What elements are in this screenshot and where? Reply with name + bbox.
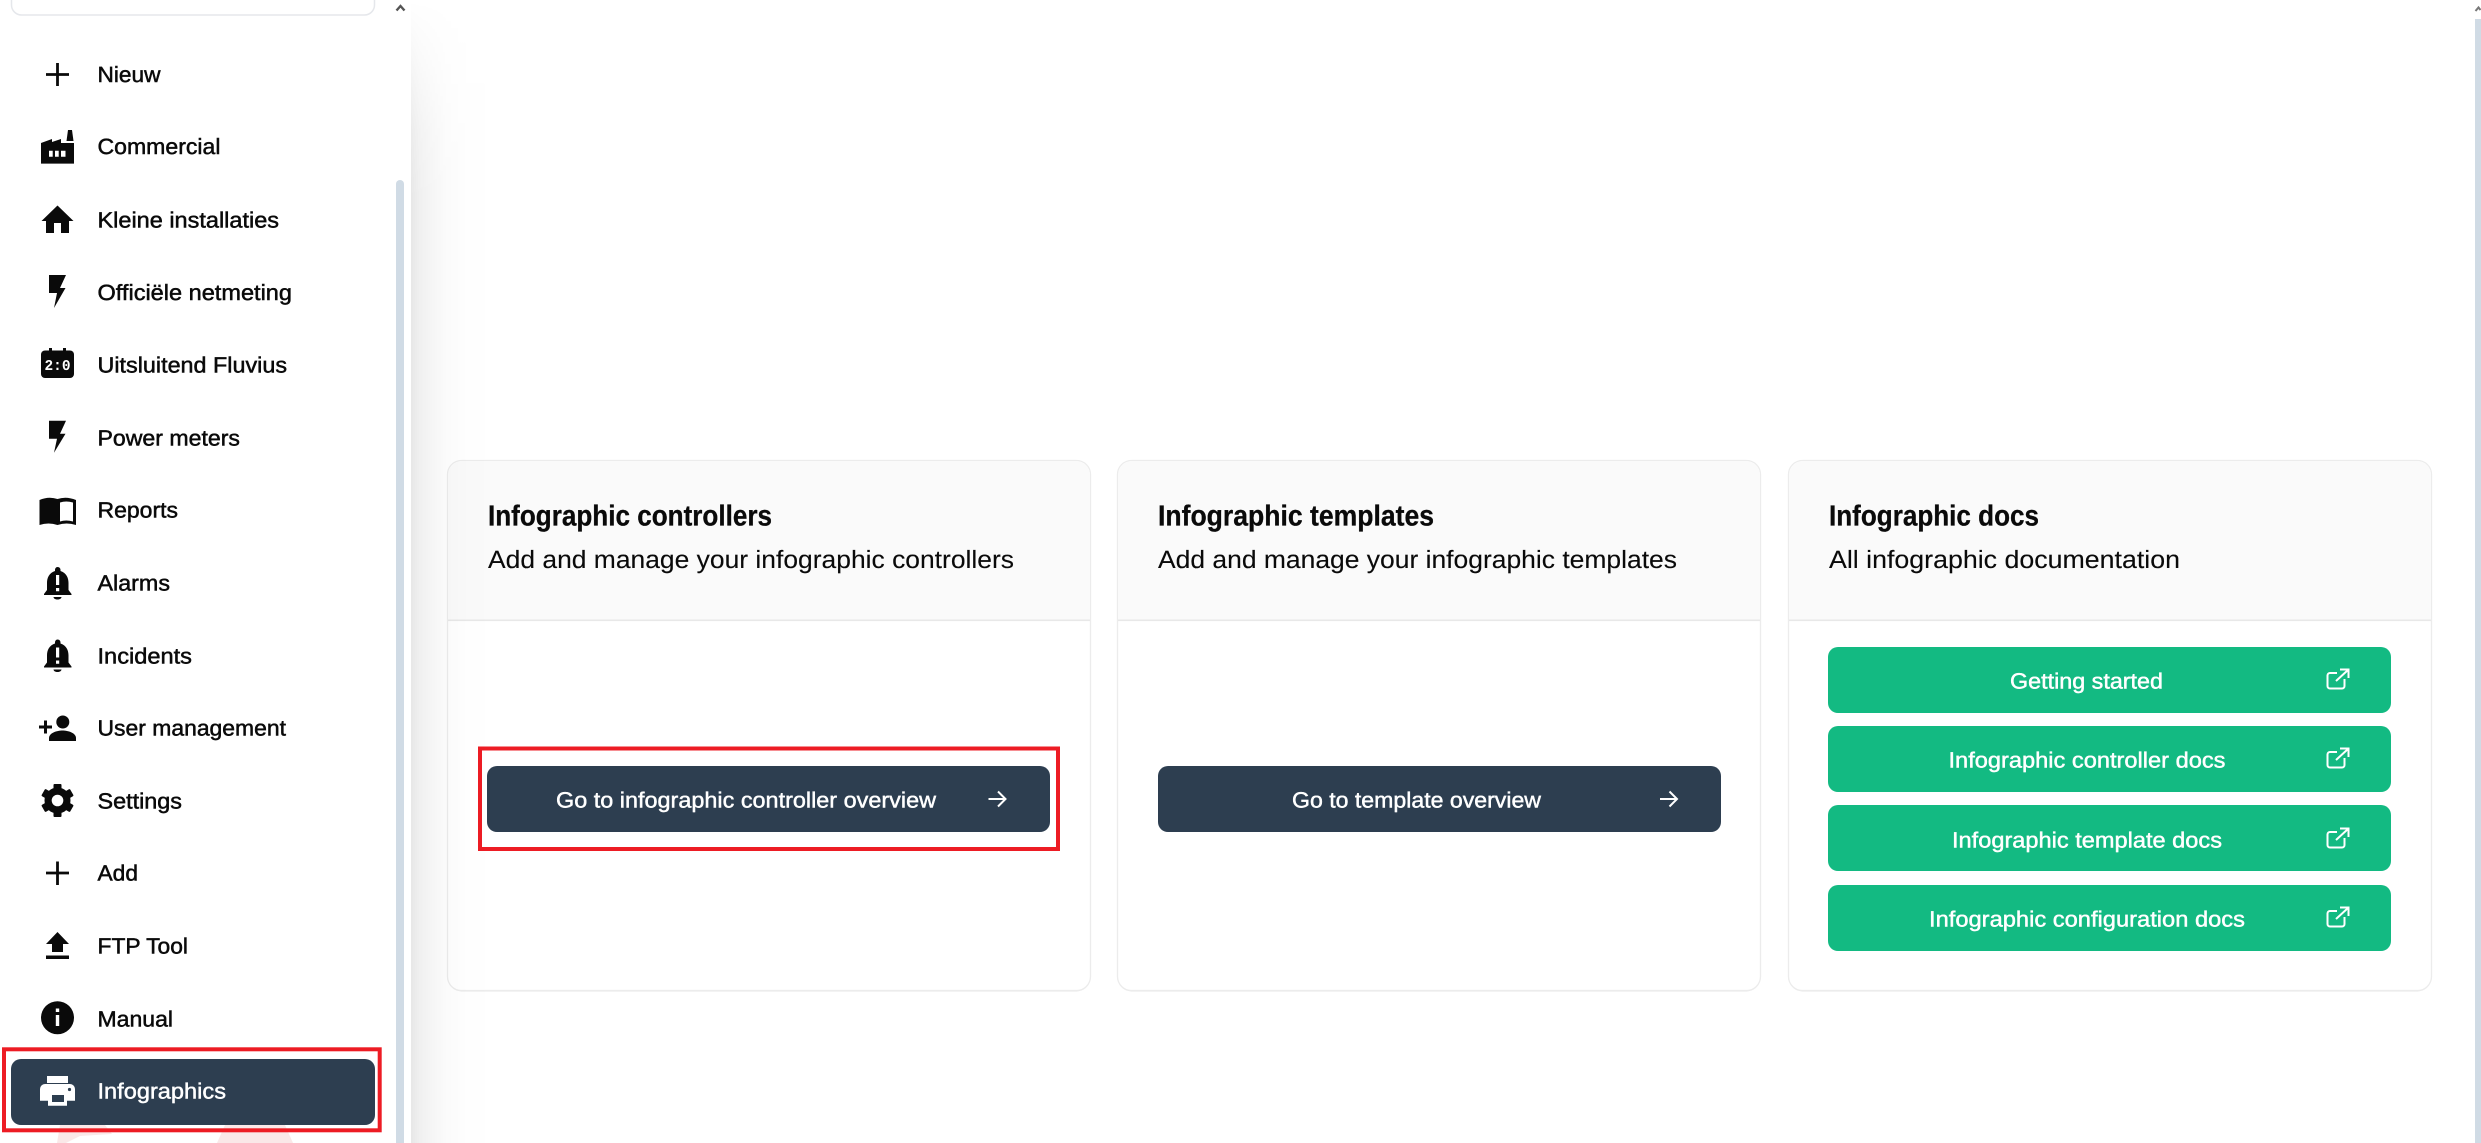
nav item: Uitsluitend Fluvius: 2:0 xyxy=(44,358,70,375)
button: getting started: Getting started xyxy=(2010,668,2163,694)
button: getting started xyxy=(1828,647,2391,713)
nav item: FTP Tool xyxy=(46,932,188,959)
nav item: Alarms xyxy=(44,567,170,600)
nav item: Incidents: Incidents xyxy=(98,644,192,668)
heading: infographic templates: Infographic templates xyxy=(1158,500,1434,532)
nav item: User management: User management xyxy=(98,716,286,740)
nav item: Settings xyxy=(41,784,182,817)
nav item: Officiële netmeting: Officiële netmeting xyxy=(98,280,292,305)
nav item: Alarms: Alarms xyxy=(98,570,170,596)
nav item: FTP Tool: FTP Tool xyxy=(98,934,188,958)
nav item: Nieuw xyxy=(46,62,161,87)
button: infographic configuration docs xyxy=(1828,885,2391,951)
nav item: Nieuw: Nieuw xyxy=(98,62,161,87)
nav item: Uitsluitend Fluvius: Uitsluitend Fluvius xyxy=(98,352,287,378)
page scrollbar xyxy=(2475,8,2481,1143)
nav item: Commercial: Commercial xyxy=(98,134,220,159)
button: controller overview xyxy=(487,766,1050,832)
nav item: Manual: Manual xyxy=(98,1006,173,1032)
heading: infographic docs: Infographic docs xyxy=(1829,500,2039,532)
text: controllers description: Add and manage your infographic controllers xyxy=(488,546,1014,574)
nav item: Reports xyxy=(40,498,178,525)
heading: infographic controllers: Infographic controllers xyxy=(488,500,772,532)
nav item: Kleine installaties: Kleine installaties xyxy=(98,208,279,232)
callout: red box around Infographics nav item xyxy=(4,1049,380,1130)
nav item: Kleine installaties xyxy=(42,206,279,233)
faint logo behind sidebar xyxy=(57,1125,293,1143)
nav item: Infographics (active) xyxy=(11,1059,375,1125)
sidebar scrollbar xyxy=(396,6,404,1143)
panel: infographic docs xyxy=(1788,460,2432,992)
button: infographic controller docs: Infographic controller docs xyxy=(1948,748,2226,772)
button: controller overview: Go to infographic controller overview xyxy=(556,788,936,812)
button: template overview: Go to template overview xyxy=(1292,788,1541,812)
nav item: Infographics (active): Infographics xyxy=(98,1078,226,1104)
text: templates description: Add and manage your infographic templates xyxy=(1158,546,1677,574)
nav item: Manual xyxy=(41,1001,173,1034)
button: infographic configuration docs: Infographic configuration docs xyxy=(1929,906,2245,932)
nav item: Officiële netmeting xyxy=(49,275,292,308)
nav item: Power meters: Power meters xyxy=(98,426,240,450)
panel: infographic templates xyxy=(1118,460,1760,992)
button: infographic template docs: Infographic template docs xyxy=(1952,828,2222,852)
nav item: Incidents xyxy=(44,640,192,672)
button: infographic controller docs xyxy=(1828,726,2391,792)
nav item: Reports: Reports xyxy=(98,498,178,522)
button: template overview xyxy=(1158,766,1721,832)
nav item: Power meters xyxy=(49,421,240,453)
search field xyxy=(12,0,374,15)
nav item: Settings: Settings xyxy=(98,788,182,814)
panel: sidebar navigation xyxy=(0,0,411,1143)
nav item: Uitsluitend Fluvius xyxy=(41,348,287,378)
button: infographic template docs xyxy=(1828,805,2391,871)
callout: red box around controller overview button xyxy=(480,748,1058,849)
panel: infographic controllers xyxy=(448,460,1090,992)
nav item: Add xyxy=(46,860,138,886)
nav item: Commercial xyxy=(41,130,220,164)
nav item: Add: Add xyxy=(98,860,138,886)
text: docs description: All infographic documentation xyxy=(1829,546,2180,574)
